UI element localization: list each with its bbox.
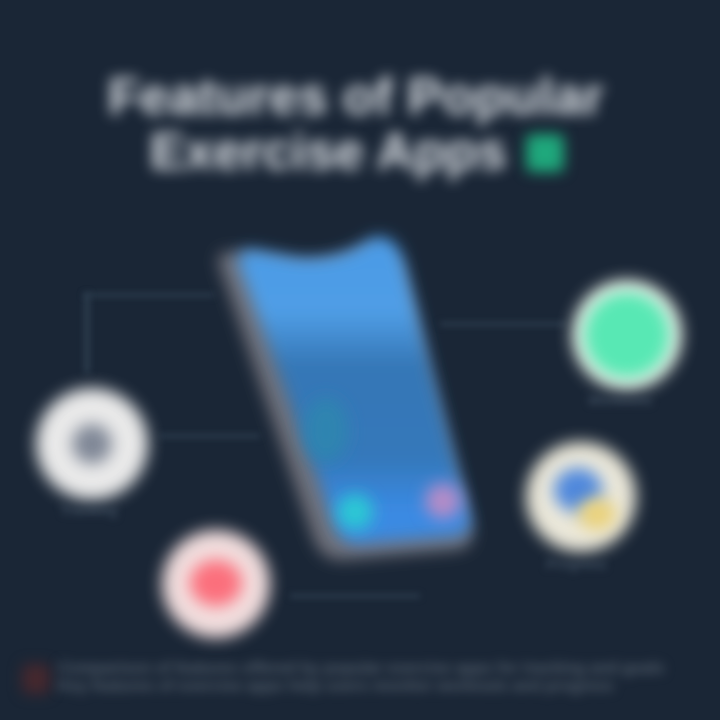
title: Features of Popular (108, 68, 604, 126)
connector: phone to top-left (84, 293, 214, 297)
label: multicolor circle: Progress (546, 556, 607, 572)
connector: white circle to phone (160, 434, 260, 438)
icon: yellow segment (578, 498, 616, 530)
screen: teal patch (304, 398, 348, 462)
icon: green dot (584, 292, 670, 378)
screen: purple button (425, 483, 461, 519)
connector: red circle to phone (290, 594, 420, 598)
screen: teal button (337, 494, 373, 530)
footer text: Comparison of features offered by popular exercise apps for tracking and goals (58, 660, 664, 677)
label: green circle: Workouts (588, 392, 652, 408)
circle: green feature (560, 268, 694, 402)
phone screen (238, 237, 470, 544)
icon: red heart (190, 560, 242, 606)
footer text (56, 659, 664, 696)
circle: multicolor feature (514, 430, 648, 564)
footer icon (22, 664, 50, 694)
label: white circle: Tracking (60, 502, 118, 518)
icon: blue segment (554, 468, 602, 512)
circle: red feature (150, 518, 282, 650)
title (100, 68, 610, 188)
connector: phone to green circle (440, 322, 565, 326)
circle: white feature (24, 376, 161, 512)
footer text: Key features of exercise apps help users monitor workouts and progress (58, 678, 614, 695)
title: Exercise Apps (150, 123, 506, 181)
icon: green square (526, 134, 564, 172)
phone body (218, 244, 472, 560)
connector: top-left vertical (84, 293, 90, 373)
icon: gray dot (72, 424, 112, 464)
